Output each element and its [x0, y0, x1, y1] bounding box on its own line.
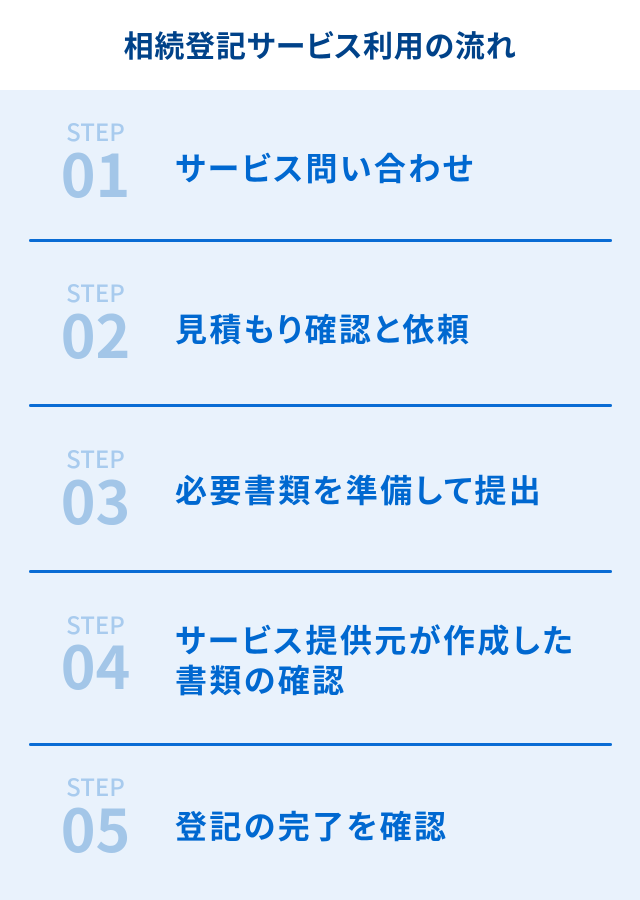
step 1 text: サービス問い合わせ — [175, 144, 475, 190]
step 2 text: 見積もり確認と依頼 — [175, 305, 471, 351]
step 2 number: 02 — [61, 290, 130, 375]
step 3 number: 03 — [61, 456, 130, 541]
step 5 number: 05 — [61, 784, 130, 869]
step 3 label: STEP — [66, 440, 125, 475]
step 4 text line 2: 書類の確認 — [175, 656, 347, 702]
step 1 label: STEP — [66, 113, 125, 148]
title: 相続登記サービス利用の流れ — [124, 22, 516, 66]
step 5 text: 登記の完了を確認 — [175, 802, 448, 848]
step 1 number: 01 — [61, 129, 130, 214]
step 2 label: STEP — [66, 274, 125, 309]
step 4 number: 04 — [61, 621, 130, 706]
step 3 text: 必要書類を準備して提出 — [175, 466, 543, 512]
step 4 label: STEP — [66, 606, 125, 641]
step 5 label: STEP — [66, 768, 125, 803]
step 4 text: サービス提供元が作成した — [175, 616, 575, 662]
